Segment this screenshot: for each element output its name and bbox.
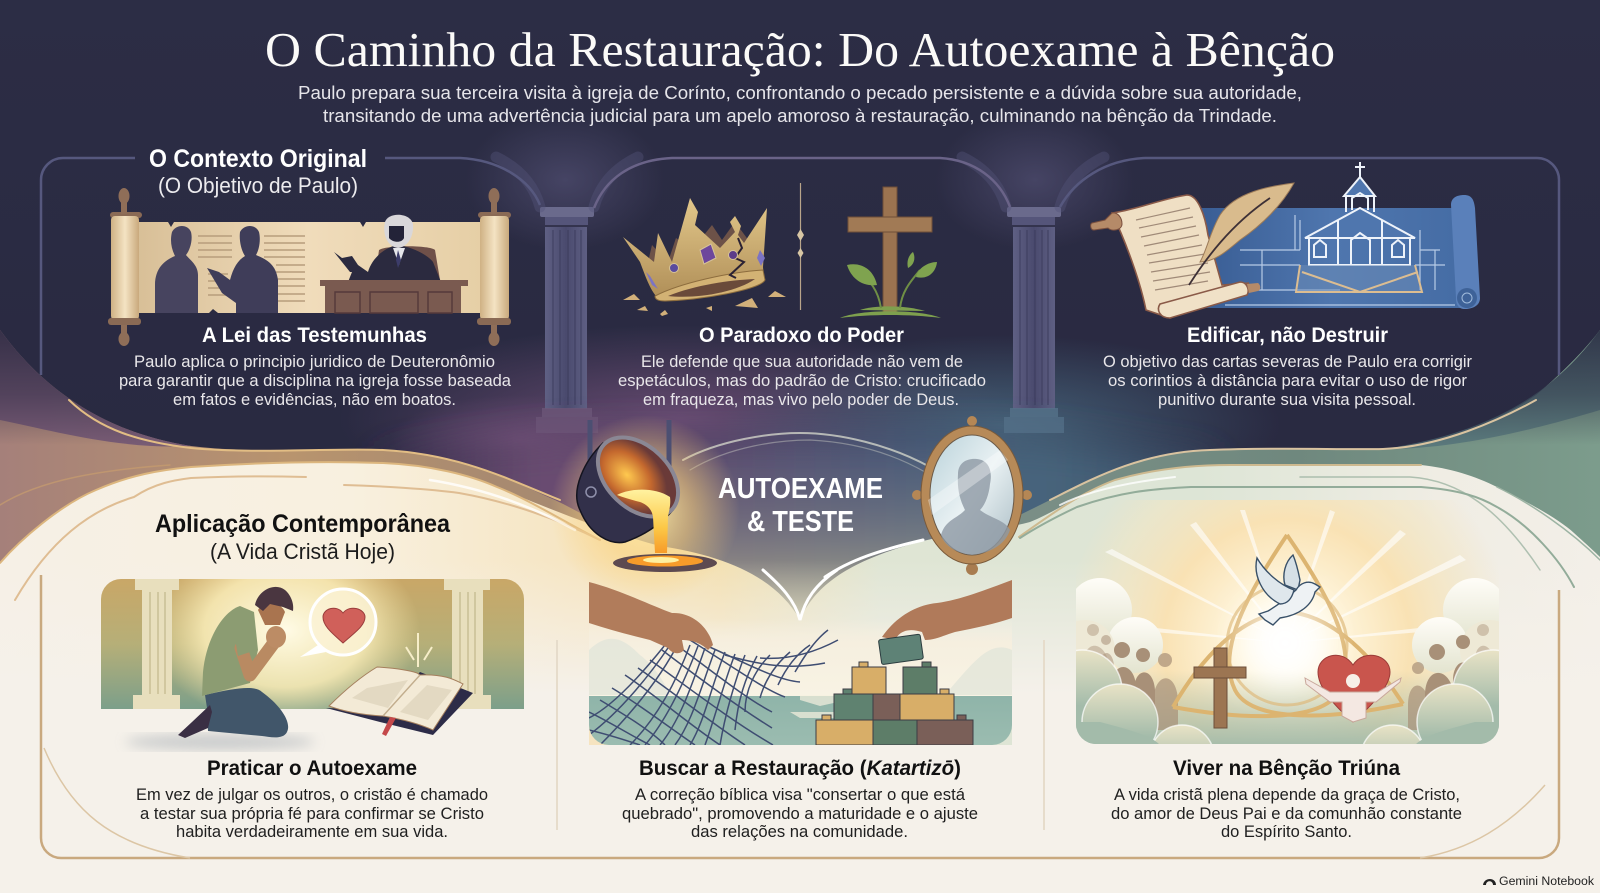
icon: mirror: [912, 416, 1032, 575]
witness text lines: [198, 236, 305, 301]
arrow: V wedge lines: [763, 540, 923, 620]
wave lines: [0, 400, 1600, 600]
panel: lower outline: [41, 575, 1559, 858]
text block: Buscar a Restauração: quebrado", promovendo a maturidade e o ajuste: [622, 804, 978, 823]
divider: [797, 183, 804, 310]
text block: Praticar o Autoexame: Praticar o Autoexame: [207, 757, 417, 780]
illustration: mending net and puzzle: [589, 570, 1012, 745]
text block: O Paradoxo do Poder: O Paradoxo do Poder: [699, 324, 904, 347]
text block: A Lei das Testemunhas: A Lei das Testemunhas: [202, 324, 427, 347]
callout: AUTOEXAME & TESTE: & TESTE: [747, 506, 854, 538]
front clouds: [1076, 649, 1122, 728]
heading: Aplicação Contemporânea: (A Vida Cristã Hoje): [210, 539, 395, 564]
text block: Edificar, não Destruir: os corintios à distância para evitar o uso de rigor: [1108, 371, 1467, 390]
wave bands: [0, 330, 1600, 615]
text block: O Paradoxo do Poder: [618, 324, 986, 409]
back clouds: [1076, 578, 1132, 632]
text block: O Paradoxo do Poder: espetáculos, mas do padrão de Cristo: crucificado: [618, 371, 986, 390]
subtitle: transitando de uma advertência judicial para um apelo amoroso à restauração, culminando na bênção da Trindade.: [323, 105, 1277, 126]
man kneeling: [205, 688, 288, 737]
icon: blueprint: [1091, 162, 1480, 318]
icon: scroll courtroom: [108, 188, 511, 346]
silhouette: witness one: [155, 226, 198, 313]
heading: O Contexto Original: O Contexto Original: [149, 145, 367, 173]
hands: [589, 582, 713, 653]
text block: Praticar o Autoexame: a testar sua própria fé para confirmar se Cristo: [140, 804, 484, 823]
text block: Edificar, não Destruir: punitivo durante sua visita pessoal.: [1158, 390, 1416, 409]
bottom scroll roll: [1158, 282, 1248, 318]
feather: [1200, 183, 1294, 262]
shadow: [125, 734, 315, 750]
open book: [326, 672, 473, 735]
text block: Praticar o Autoexame: [136, 757, 488, 841]
rolled blueprint end: [1451, 195, 1480, 309]
speech bubble heart: [310, 589, 376, 655]
text block: Viver na Bênção Triúna: [1111, 757, 1462, 841]
text block: Praticar o Autoexame: Em vez de julgar os outros, o cristão é chamado: [136, 785, 488, 804]
columns: [133, 579, 180, 709]
cross: [1194, 648, 1246, 728]
text block: Buscar a Restauração: das relações na comunidade.: [691, 822, 908, 841]
illustration: Trinity blessing: [1076, 500, 1499, 744]
rays: [1105, 510, 1466, 643]
title: O Caminho da Restauração: Do Autoexame à Bênção: [265, 22, 1335, 77]
scroll paper: [1112, 195, 1249, 318]
icon: broken crown: [623, 198, 786, 316]
text block: A Lei das Testemunhas: [119, 324, 512, 409]
heading: Aplicação Contemporânea: [155, 510, 451, 564]
text block: A Lei das Testemunhas: em fatos e evidências, não em boatos.: [173, 390, 456, 409]
text block: Edificar, não Destruir: [1103, 324, 1472, 409]
icon: crucible pouring molten metal: [550, 415, 740, 605]
net: [589, 630, 838, 745]
callout: AUTOEXAME & TESTE: [718, 473, 883, 538]
callout: AUTOEXAME & TESTE: AUTOEXAME: [718, 473, 883, 505]
heading: Aplicação Contemporânea: Aplicação Contemporânea: [155, 510, 451, 538]
silhouette: witness two: [207, 226, 278, 313]
sparkle: [406, 633, 432, 667]
judge: [375, 246, 440, 280]
illustration: kneeling prayer: [101, 579, 524, 752]
column: left: [540, 207, 594, 409]
subtitle: Paulo prepara sua terceira visita à igreja de Corínto, confrontando o pecado persistente e a dúvida sobre sua autoridade,: [298, 82, 1302, 103]
column: right: [1007, 207, 1061, 409]
text block: A Lei das Testemunhas: Paulo aplica o principio juridico de Deuteronômio: [134, 352, 495, 371]
text block: Viver na Bênção Triúna: A vida cristã plena depende da graça de Cristo,: [1114, 785, 1460, 804]
text block: Edificar, não Destruir: O objetivo das cartas severas de Paulo era corrigir: [1103, 352, 1472, 371]
footer: Gemini Notebook: Gemini Notebook: [1499, 876, 1594, 888]
lower section: cream panel background: [0, 462, 1600, 893]
text block: A Lei das Testemunhas: para garantir que a disciplina na igreja fosse baseada: [119, 371, 512, 390]
text block: Viver na Bênção Triúna: Viver na Bênção Triúna: [1173, 757, 1400, 780]
dove: [1256, 555, 1320, 625]
icon: cross with plants: [840, 187, 941, 318]
church: [1305, 162, 1415, 265]
column bases: [542, 408, 592, 417]
heart with embracing figure: [1318, 655, 1390, 722]
text block: Viver na Bênção Triúna: do Espírito Santo.: [1221, 822, 1352, 841]
left roller: [110, 212, 142, 218]
glow center: [1243, 601, 1327, 685]
people: [1084, 624, 1494, 730]
text block: Buscar a Restauração: [622, 757, 978, 841]
heading: O Contexto Original: (O Objetivo de Paulo): [158, 173, 358, 198]
text block: Praticar o Autoexame: habita verdadeiramente em sua vida.: [176, 822, 448, 841]
text block: Viver na Bênção Triúna: do amor de Deus Pai e da comunhão constante: [1111, 804, 1462, 823]
heading: O Contexto Original: [149, 145, 367, 198]
panel: upper outlines and arches: [41, 157, 1559, 375]
puzzle: [816, 662, 973, 745]
text block: Edificar, não Destruir: Edificar, não Destruir: [1187, 324, 1388, 347]
text block: O Paradoxo do Poder: Ele defende que sua autoridade não vem de: [641, 352, 963, 371]
desk: [320, 280, 468, 313]
triquetra: [1173, 535, 1403, 716]
text block: Buscar a Restauração: Buscar a Restauração (Katartizō): [639, 757, 961, 780]
subtitle: [298, 82, 1302, 126]
right roller: [478, 212, 511, 218]
text block: O Paradoxo do Poder: em fraqueza, mas vivo pelo poder de Deus.: [643, 390, 959, 409]
text block: Buscar a Restauração: A correção bíblica visa "consertar o que está: [635, 785, 966, 804]
